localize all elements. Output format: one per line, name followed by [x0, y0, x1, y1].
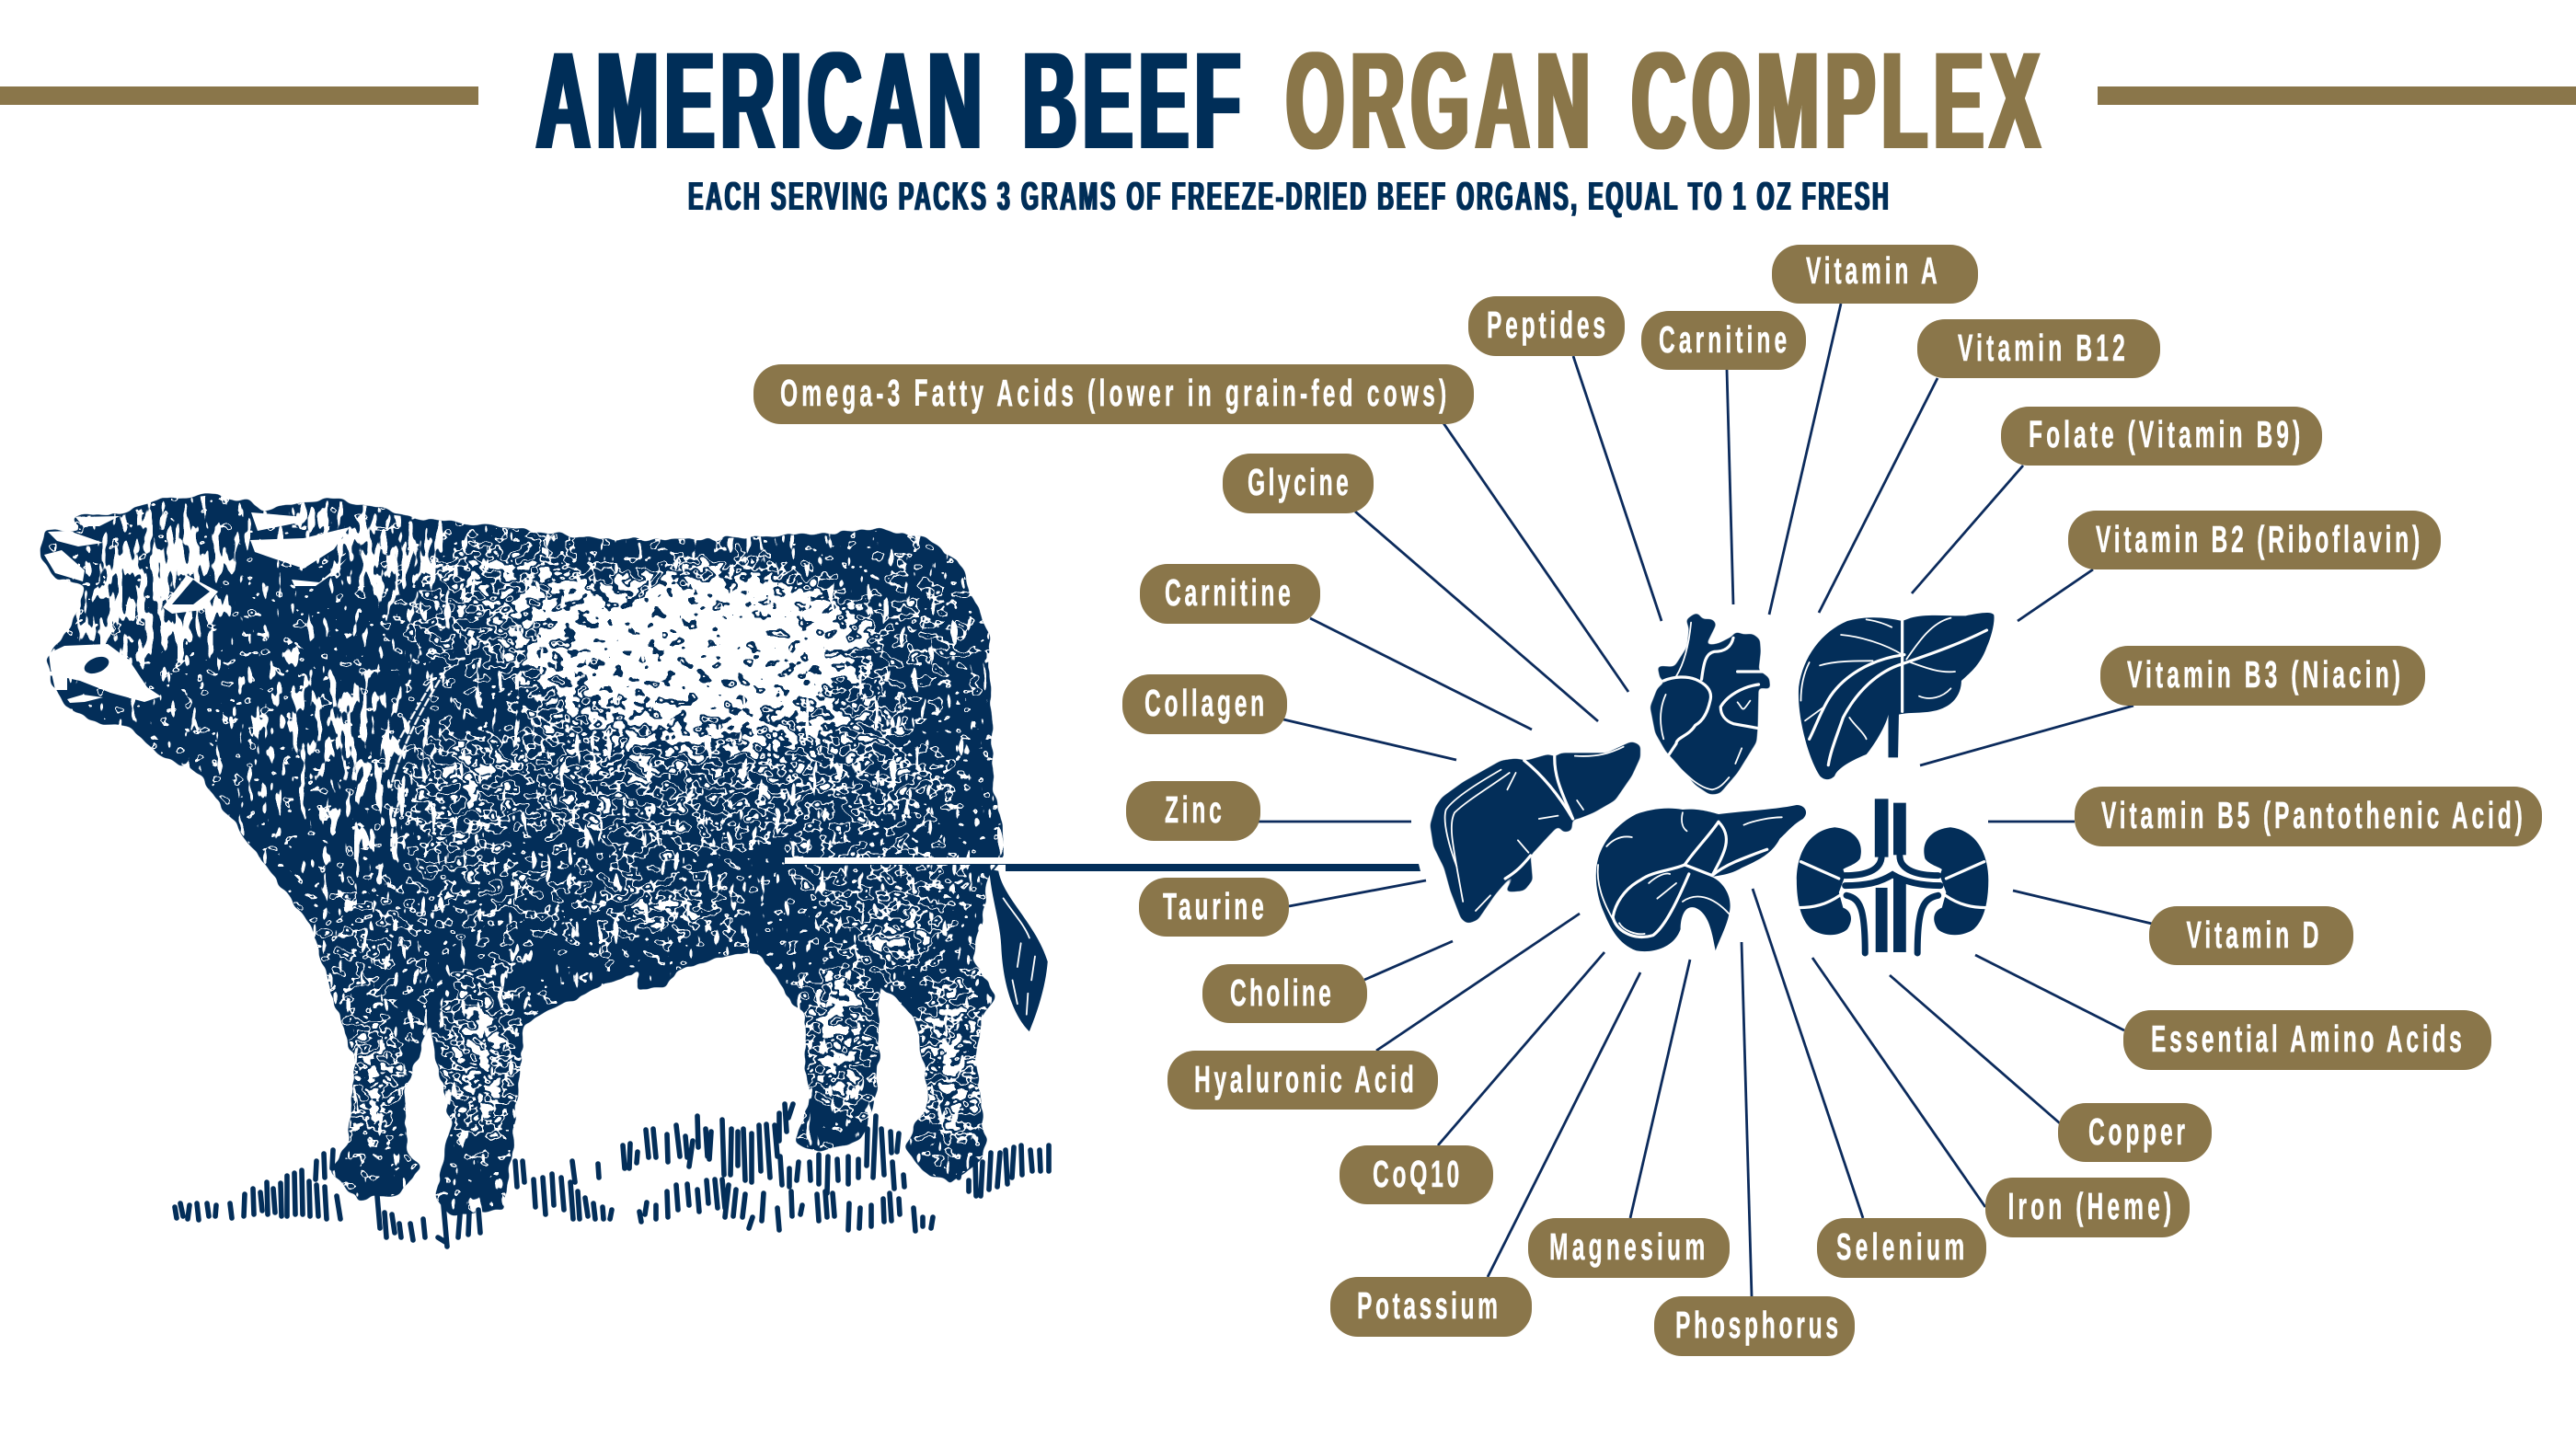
label: Copper — [1890, 975, 2212, 1162]
label: Magnesium: Magnesium — [1549, 1226, 1705, 1269]
label: Vitamin A — [1769, 245, 1978, 615]
label: Choline — [1202, 941, 1453, 1023]
title rule left — [0, 86, 478, 105]
label: Collagen — [1122, 674, 1456, 760]
label: Essential Amino Acids — [1975, 955, 2491, 1070]
illustration: bull on grass — [39, 495, 1049, 1247]
label: Omega-3 Fatty Acids: Omega-3 Fatty Acids (lower in grain-fed cows) — [780, 373, 1446, 415]
label: Selenium — [1753, 889, 1986, 1278]
label: Carnitine top: Carnitine — [1659, 319, 1787, 362]
label: Iron (Heme) — [1812, 958, 2190, 1237]
bull head and neck hair streaks — [74, 510, 455, 874]
label: Zinc — [1126, 781, 1411, 841]
label: Glycine — [1223, 454, 1598, 721]
label: Folate — [1912, 407, 2322, 593]
title: ORGAN COMPLEX — [1286, 23, 2040, 178]
label: Folate: Folate (Vitamin B9) — [2029, 414, 2300, 456]
icon: pancreas and spleen — [1596, 805, 1806, 951]
bull shoulder fold lines — [384, 672, 445, 851]
label: Potassium: Potassium — [1357, 1285, 1498, 1328]
subtitle: EACH SERVING PACKS 3 GRAMS OF FREEZE-DRIED BEEF ORGANS, EQUAL TO 1 OZ FRESH — [688, 174, 1889, 219]
label: Omega-3 Fatty Acids — [753, 364, 1628, 692]
label: Iron (Heme): Iron (Heme) — [2007, 1186, 2171, 1228]
pointer bar from bull to organs — [785, 857, 1420, 871]
grass — [175, 1104, 1049, 1247]
label: Zinc: Zinc — [1165, 789, 1222, 832]
bull silhouette — [39, 495, 1006, 1215]
label: Magnesium — [1528, 960, 1730, 1278]
organs cluster — [1430, 612, 1995, 953]
label: Vitamin B12 — [1819, 319, 2160, 613]
label: Phosphorus: Phosphorus — [1675, 1305, 1838, 1347]
label: CoQ10: CoQ10 — [1373, 1154, 1459, 1196]
label: Carnitine left — [1140, 564, 1532, 730]
label: Glycine: Glycine — [1248, 462, 1349, 504]
label: Vitamin D: Vitamin D — [2186, 914, 2319, 957]
label: Potassium — [1330, 972, 1640, 1337]
label: Taurine — [1139, 878, 1426, 937]
bull face details — [44, 512, 350, 703]
label: Vitamin B2: Vitamin B2 (Riboflavin) — [2096, 519, 2420, 561]
label: Choline: Choline — [1230, 972, 1331, 1015]
label: Vitamin B3: Vitamin B3 (Niacin) — [2127, 654, 2400, 696]
label: Taurine: Taurine — [1163, 886, 1264, 928]
label: Carnitine top — [1641, 311, 1806, 604]
bull hide speckle texture — [316, 539, 979, 1152]
label: Copper: Copper — [2088, 1111, 2185, 1154]
label: Vitamin D — [2013, 891, 2353, 965]
label: Peptides: Peptides — [1487, 305, 1605, 347]
label: Selenium: Selenium — [1836, 1226, 1964, 1269]
label: Vitamin A: Vitamin A — [1806, 250, 1938, 293]
label: Vitamin B5 — [1988, 787, 2542, 846]
icon: beef liver upper right — [1799, 613, 1995, 779]
label: Vitamin B2 — [2018, 511, 2441, 621]
title — [536, 23, 2040, 178]
bull tail — [989, 869, 1048, 1031]
label: Hyaluronic Acid — [1167, 914, 1580, 1110]
label: CoQ10 — [1340, 952, 1604, 1204]
title rule right — [2098, 86, 2576, 105]
label: Hyaluronic Acid: Hyaluronic Acid — [1194, 1059, 1414, 1101]
label: Collagen: Collagen — [1144, 683, 1264, 725]
label: Carnitine left: Carnitine — [1165, 572, 1291, 615]
label: Vitamin B3 — [1920, 646, 2425, 765]
icon: kidneys — [1797, 799, 1988, 953]
label: Vitamin B12: Vitamin B12 — [1958, 328, 2125, 370]
title: AMERICAN BEEF — [536, 23, 1240, 178]
label: Essential Amino Acids: Essential Amino Acids — [2151, 1018, 2462, 1061]
icon: liver left — [1430, 742, 1640, 924]
label: Phosphorus — [1654, 942, 1855, 1356]
icon: heart — [1650, 612, 1770, 795]
label: Peptides — [1468, 296, 1662, 621]
label: Vitamin B5: Vitamin B5 (Pantothenic Acid) — [2101, 795, 2523, 837]
